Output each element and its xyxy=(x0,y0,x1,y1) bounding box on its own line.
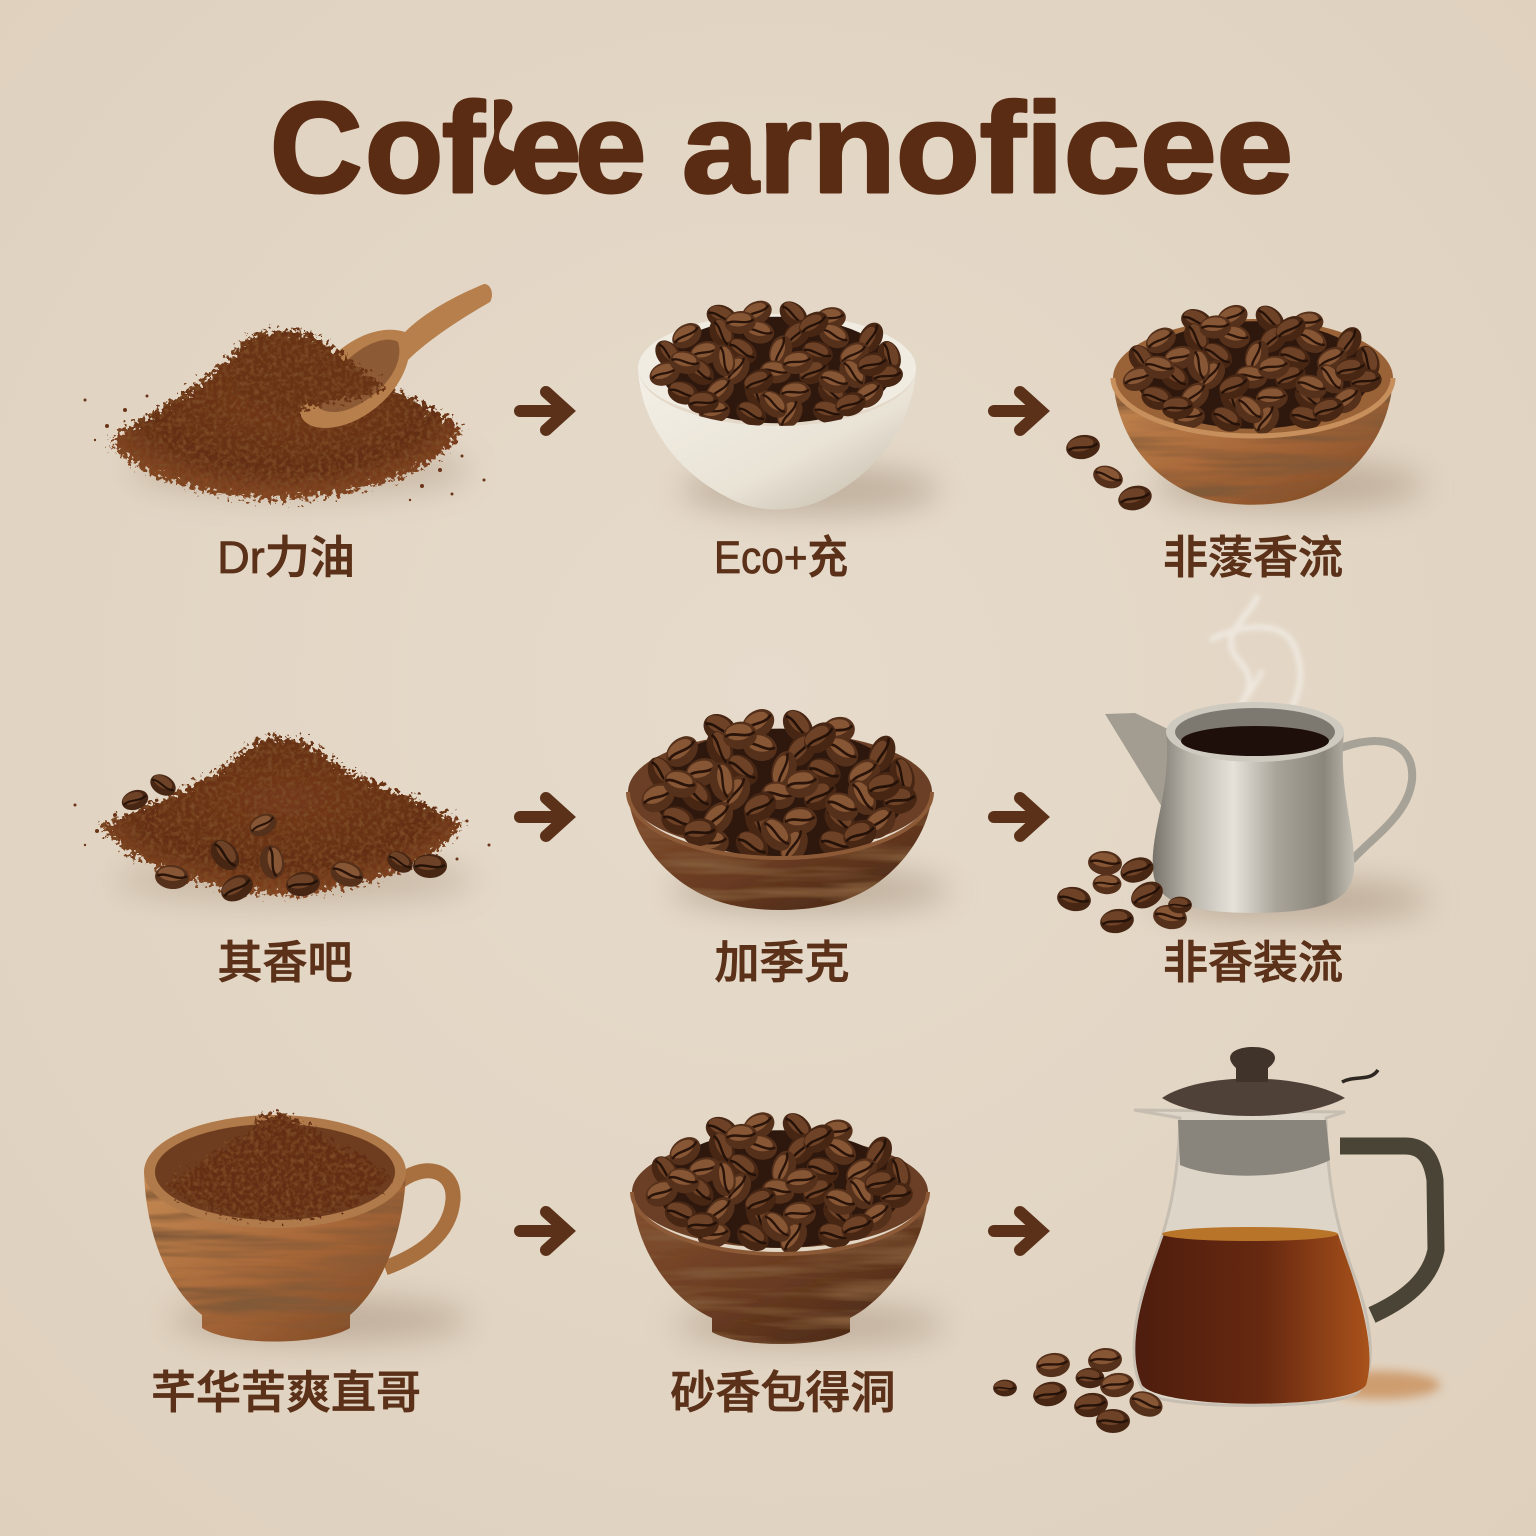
arrow 1 xyxy=(520,392,567,430)
arrow 2 xyxy=(994,392,1041,430)
step 5: dark wooden bowl of beans xyxy=(628,703,950,912)
step 4: coffee grounds pile with beans xyxy=(74,737,490,907)
beans xyxy=(646,296,905,433)
beans xyxy=(638,703,919,870)
step 2: white bowl of beans xyxy=(638,296,940,514)
beans xyxy=(1119,300,1384,439)
wooden spoon xyxy=(230,284,492,428)
label 2: Eco+充 xyxy=(714,532,848,583)
label 8: 砂香包得洞 xyxy=(670,1367,896,1418)
lid xyxy=(1162,1078,1345,1116)
spout xyxy=(1105,713,1180,820)
label 1: Dr力油 xyxy=(217,532,355,583)
label 3: 非蔆香流 xyxy=(1163,532,1343,583)
beans xyxy=(642,1107,915,1259)
loose beans xyxy=(1055,850,1192,936)
loose beans xyxy=(1064,432,1155,514)
title: Cofee xyxy=(270,77,646,220)
steam xyxy=(1210,595,1300,750)
grounds xyxy=(165,1113,388,1218)
cup handle xyxy=(385,1171,453,1268)
label 5: 加季克 xyxy=(714,937,850,988)
filter basket xyxy=(1178,1120,1330,1176)
step 1: ground coffee with wooden spoon xyxy=(84,284,492,501)
knob xyxy=(1230,1047,1275,1082)
glass body xyxy=(1134,1110,1370,1406)
title xyxy=(270,77,1293,220)
step 6: steel pitcher with steam xyxy=(1055,595,1430,936)
arrow 4 xyxy=(994,798,1041,836)
beans on pile xyxy=(119,770,447,907)
arrow 5 xyxy=(520,1212,567,1250)
handle xyxy=(1335,741,1412,860)
step 3: wooden bowl of beans xyxy=(1064,300,1425,514)
carafe handle xyxy=(1340,1146,1436,1315)
step 7: wooden cup with grounds xyxy=(144,1113,470,1342)
arrow 6 xyxy=(994,1212,1041,1250)
loose beans xyxy=(993,1347,1166,1433)
arrow 3 xyxy=(520,798,567,836)
rim and coffee xyxy=(1166,702,1344,762)
title: arnoficee xyxy=(682,77,1293,220)
body xyxy=(1153,732,1354,913)
step 9: glass carafe with brewed coffee xyxy=(993,1047,1440,1433)
label 6: 非香装流 xyxy=(1163,937,1343,988)
coffee xyxy=(1135,1230,1369,1404)
label 4: 其香吧 xyxy=(217,937,353,988)
step 8: wooden bowl of beans xyxy=(632,1107,945,1345)
label 7: 芊华苦爽直哥 xyxy=(151,1367,421,1418)
